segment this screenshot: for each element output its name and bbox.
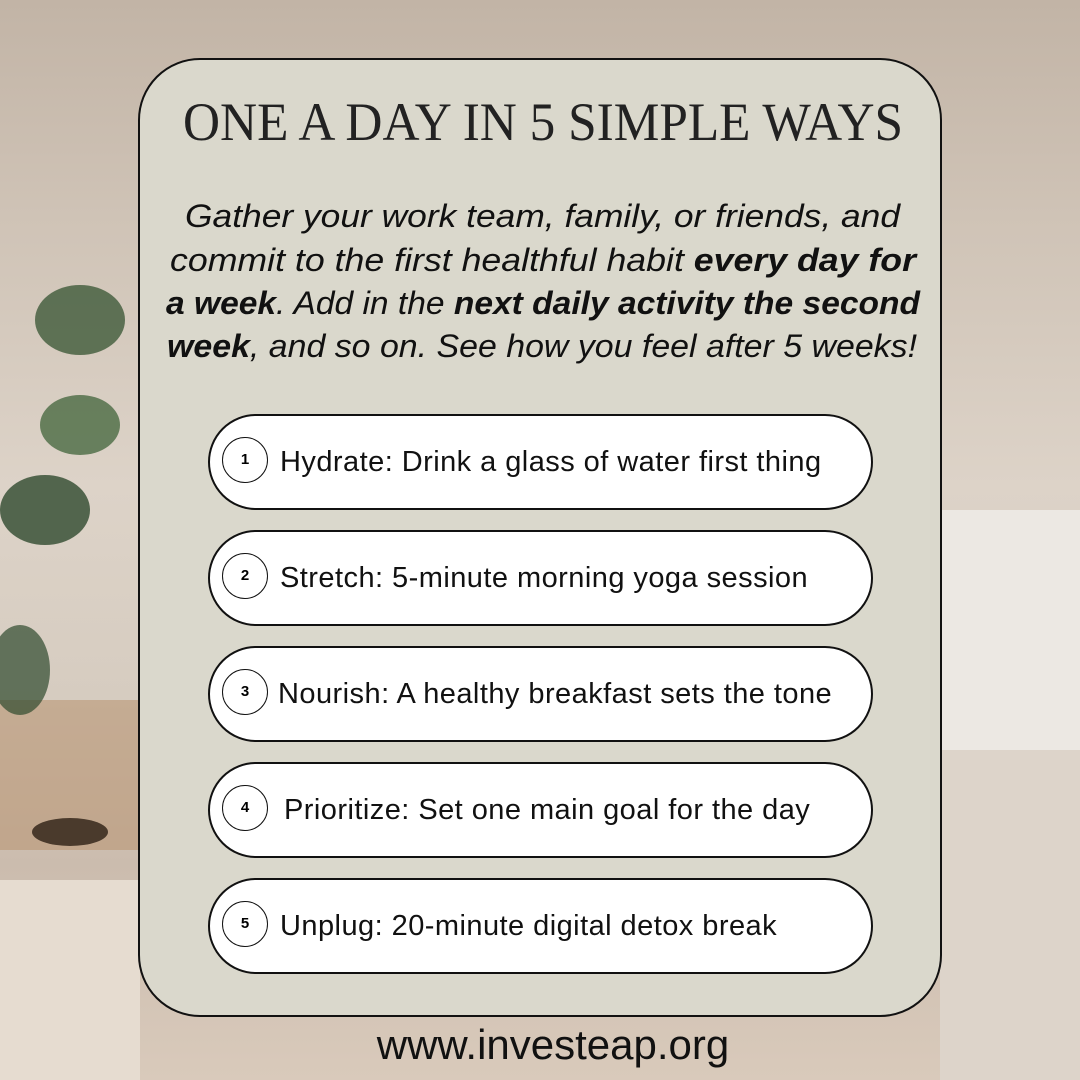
intro paragraph: a week. Add in the next daily activity the second [166, 285, 922, 321]
item 3: 3 [241, 683, 249, 700]
item 3 [208, 646, 873, 742]
item 4 [208, 762, 873, 858]
item 3: Nourish: A healthy breakfast sets the tone [278, 678, 832, 710]
item 1: Hydrate: Drink a glass of water first thing [280, 446, 822, 478]
item 4: 4 [241, 799, 249, 816]
item 2 [208, 530, 873, 626]
item 5: Unplug: 20-minute digital detox break [280, 910, 777, 942]
intro paragraph: commit to the first healthful habit every day for [170, 242, 918, 278]
title: ONE A DAY IN 5 SIMPLE WAYS [183, 92, 903, 152]
item 2: Stretch: 5-minute morning yoga session [280, 562, 808, 594]
footer url: www.investeap.org [377, 1021, 729, 1068]
item 2: 2 [241, 567, 249, 584]
item 4: Prioritize: Set one main goal for the day [284, 794, 810, 826]
item 1: 1 [241, 451, 249, 468]
intro paragraph: week, and so on. See how you feel after 5 weeks! [167, 328, 917, 364]
main card [138, 58, 942, 1017]
item 5 [208, 878, 873, 974]
intro paragraph: Gather your work team, family, or friends, and [185, 198, 901, 234]
intro paragraph [166, 198, 922, 364]
item 5: 5 [241, 915, 249, 932]
item 1 [208, 414, 873, 510]
